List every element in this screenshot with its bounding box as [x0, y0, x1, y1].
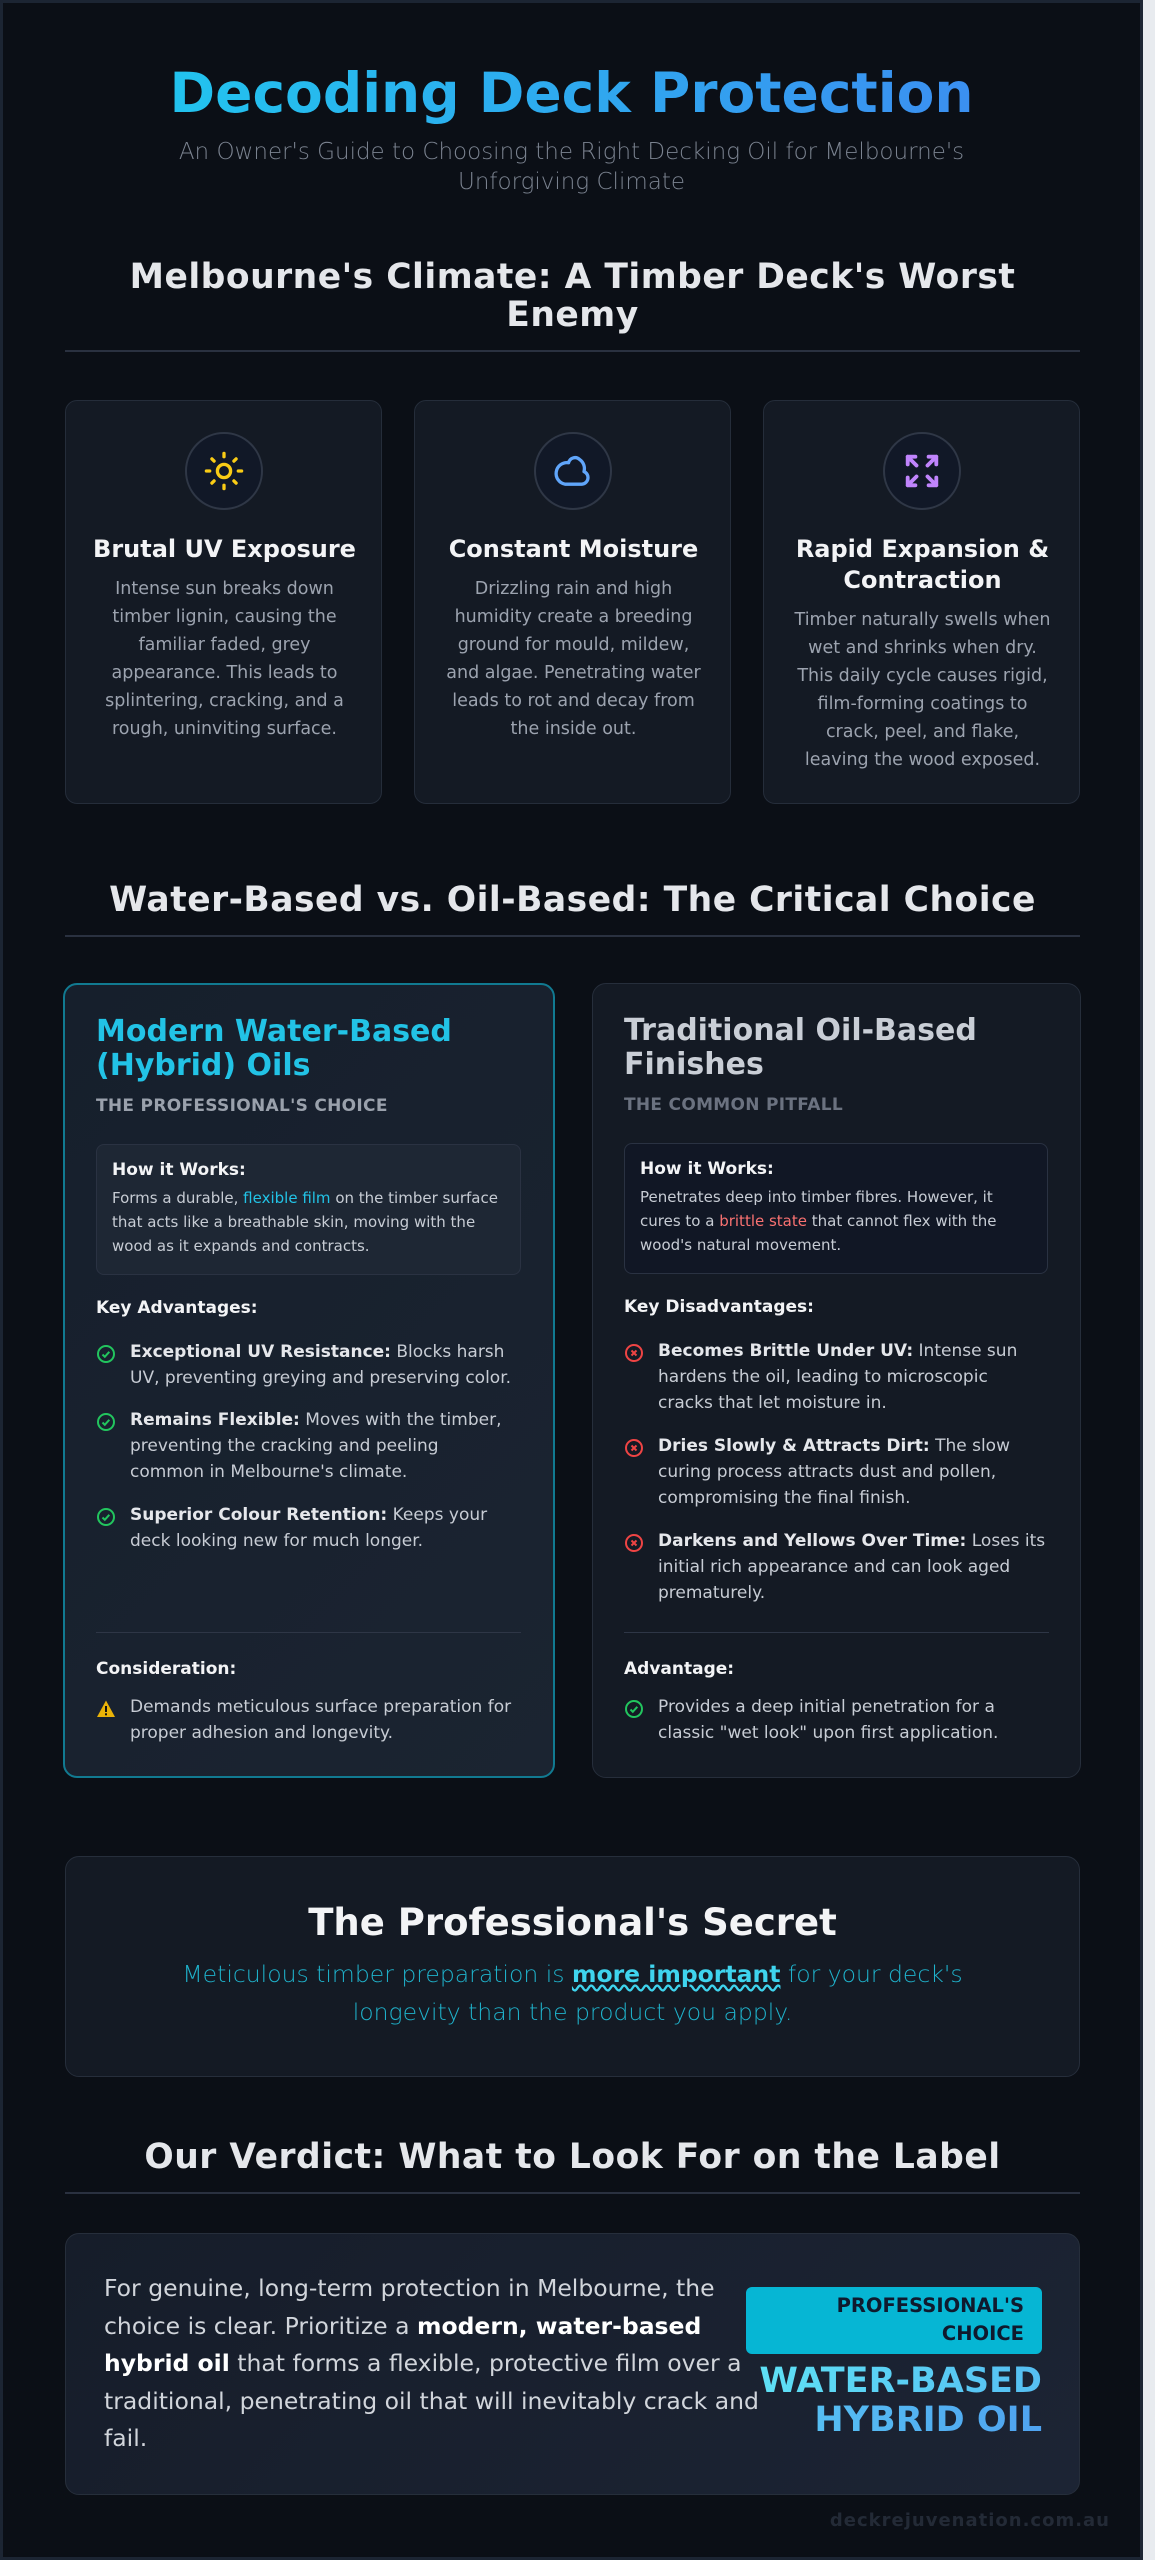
how it works box — [624, 1143, 1048, 1274]
secret title: The Professional's Secret — [308, 1901, 837, 1944]
subheading: THE COMMON PITFALL — [624, 1095, 843, 1115]
heading: verdict: Our Verdict: What to Look For on the Label — [144, 2137, 1001, 2177]
label: Key Advantages: — [96, 1298, 258, 1318]
subheading: THE PROFESSIONAL'S CHOICE — [96, 1096, 388, 1116]
verdict text: For genuine, long-term protection in Melbourne, the choice is clear. Prioritize a modern, water-based hybrid oil that forms a flexible, protective film over a traditional, penetrating oil that will inevitably crack and fail. — [104, 2274, 759, 2452]
panel: moisture card — [414, 400, 731, 804]
panel: UV card — [65, 400, 382, 804]
panel heading — [96, 1014, 452, 1083]
panel heading: Modern Water-Based — [96, 1014, 452, 1049]
panel: professional's secret — [65, 1856, 1080, 2077]
panel: verdict — [65, 2233, 1080, 2495]
advantage 2: Remains Flexible: Moves with the timber, preventing the cracking and peeling common in Melbourne's climate. — [130, 1410, 501, 1482]
panel heading: Traditional Oil-Based — [624, 1013, 977, 1048]
card text: Intense sun breaks down timber lignin, causing the familiar faded, grey appearance. This leads to splintering, cracking, and a rough, uninviting surface. — [105, 579, 344, 739]
how it works box: Forms a durable, flexible film on the timber surface that acts like a breathable skin, moving with the wood as it expands and contracts. — [112, 1189, 498, 1255]
subtitle: An Owner's Guide to Choosing the Right Decking Oil for Melbourne's Unforgiving Climate — [179, 139, 964, 195]
advantage 3: Superior Colour Retention: Keeps your deck looking new for much longer. — [130, 1505, 487, 1551]
secret text: Meticulous timber preparation is more important for your deck's longevity than the product you apply. — [182, 1960, 963, 2026]
heading: comparison: Water-Based vs. Oil-Based: The Critical Choice — [109, 880, 1036, 920]
card title: Constant Moisture — [449, 535, 698, 563]
panel heading: (Hybrid) Oils — [96, 1048, 310, 1083]
footer: deckrejuvenation.com.au — [830, 2510, 1110, 2531]
badge — [746, 2287, 1042, 2354]
how it works box: How it Works: — [112, 1160, 246, 1180]
panel: oil-based — [592, 983, 1081, 1778]
panel: water-based — [63, 983, 555, 1778]
card text: Timber naturally swells when wet and shrinks when dry. This daily cycle causes rigid, film-forming coatings to crack, peel, and flake, leaving the wood exposed. — [795, 610, 1050, 770]
label: Advantage: — [624, 1659, 734, 1679]
badge: PROFESSIONAL'S CHOICE — [837, 2294, 1024, 2345]
how it works box: Penetrates deep into timber fibres. However, it cures to a brittle state that cannot flex with the wood's natural movement. — [640, 1188, 997, 1254]
disadvantage 2: Dries Slowly & Attracts Dirt: The slow curing process attracts dust and pollen, compromising the final finish. — [658, 1436, 1010, 1508]
disadvantage 1: Becomes Brittle Under UV: Intense sun hardens the oil, leading to microscopic cracks that let moisture in. — [658, 1341, 1017, 1413]
panel heading: Finishes — [624, 1047, 764, 1082]
panel: expansion card — [763, 400, 1080, 804]
heading: climate: Melbourne's Climate: A Timber Deck's Worst Enemy — [130, 257, 1015, 335]
consideration item: Demands meticulous surface preparation for proper adhesion and longevity. — [130, 1697, 511, 1743]
advantage 1: Exceptional UV Resistance: Blocks harsh UV, preventing greying and preserving color. — [130, 1342, 511, 1388]
card title: Rapid Expansion & Contraction — [796, 535, 1049, 594]
icon: cloud — [534, 432, 612, 510]
icon: expand arrows — [883, 432, 961, 510]
product callout: WATER-BASED HYBRID OIL — [759, 2361, 1042, 2440]
title: Decoding Deck Protection — [169, 61, 974, 125]
label: Key Disadvantages: — [624, 1297, 814, 1317]
icon: sun — [185, 432, 263, 510]
how it works box — [96, 1144, 521, 1275]
label: Consideration: — [96, 1659, 236, 1679]
how it works box: How it Works: — [640, 1159, 774, 1179]
card title: Brutal UV Exposure — [93, 535, 356, 563]
advantage item: Provides a deep initial penetration for a classic "wet look" upon first application. — [658, 1697, 998, 1743]
panel heading — [624, 1013, 977, 1082]
card text: Drizzling rain and high humidity create a breeding ground for mould, mildew, and algae. Penetrating water leads to rot and decay from the inside out. — [446, 579, 701, 739]
disadvantage 3: Darkens and Yellows Over Time: Loses its initial rich appearance and can look aged prematurely. — [658, 1531, 1045, 1603]
